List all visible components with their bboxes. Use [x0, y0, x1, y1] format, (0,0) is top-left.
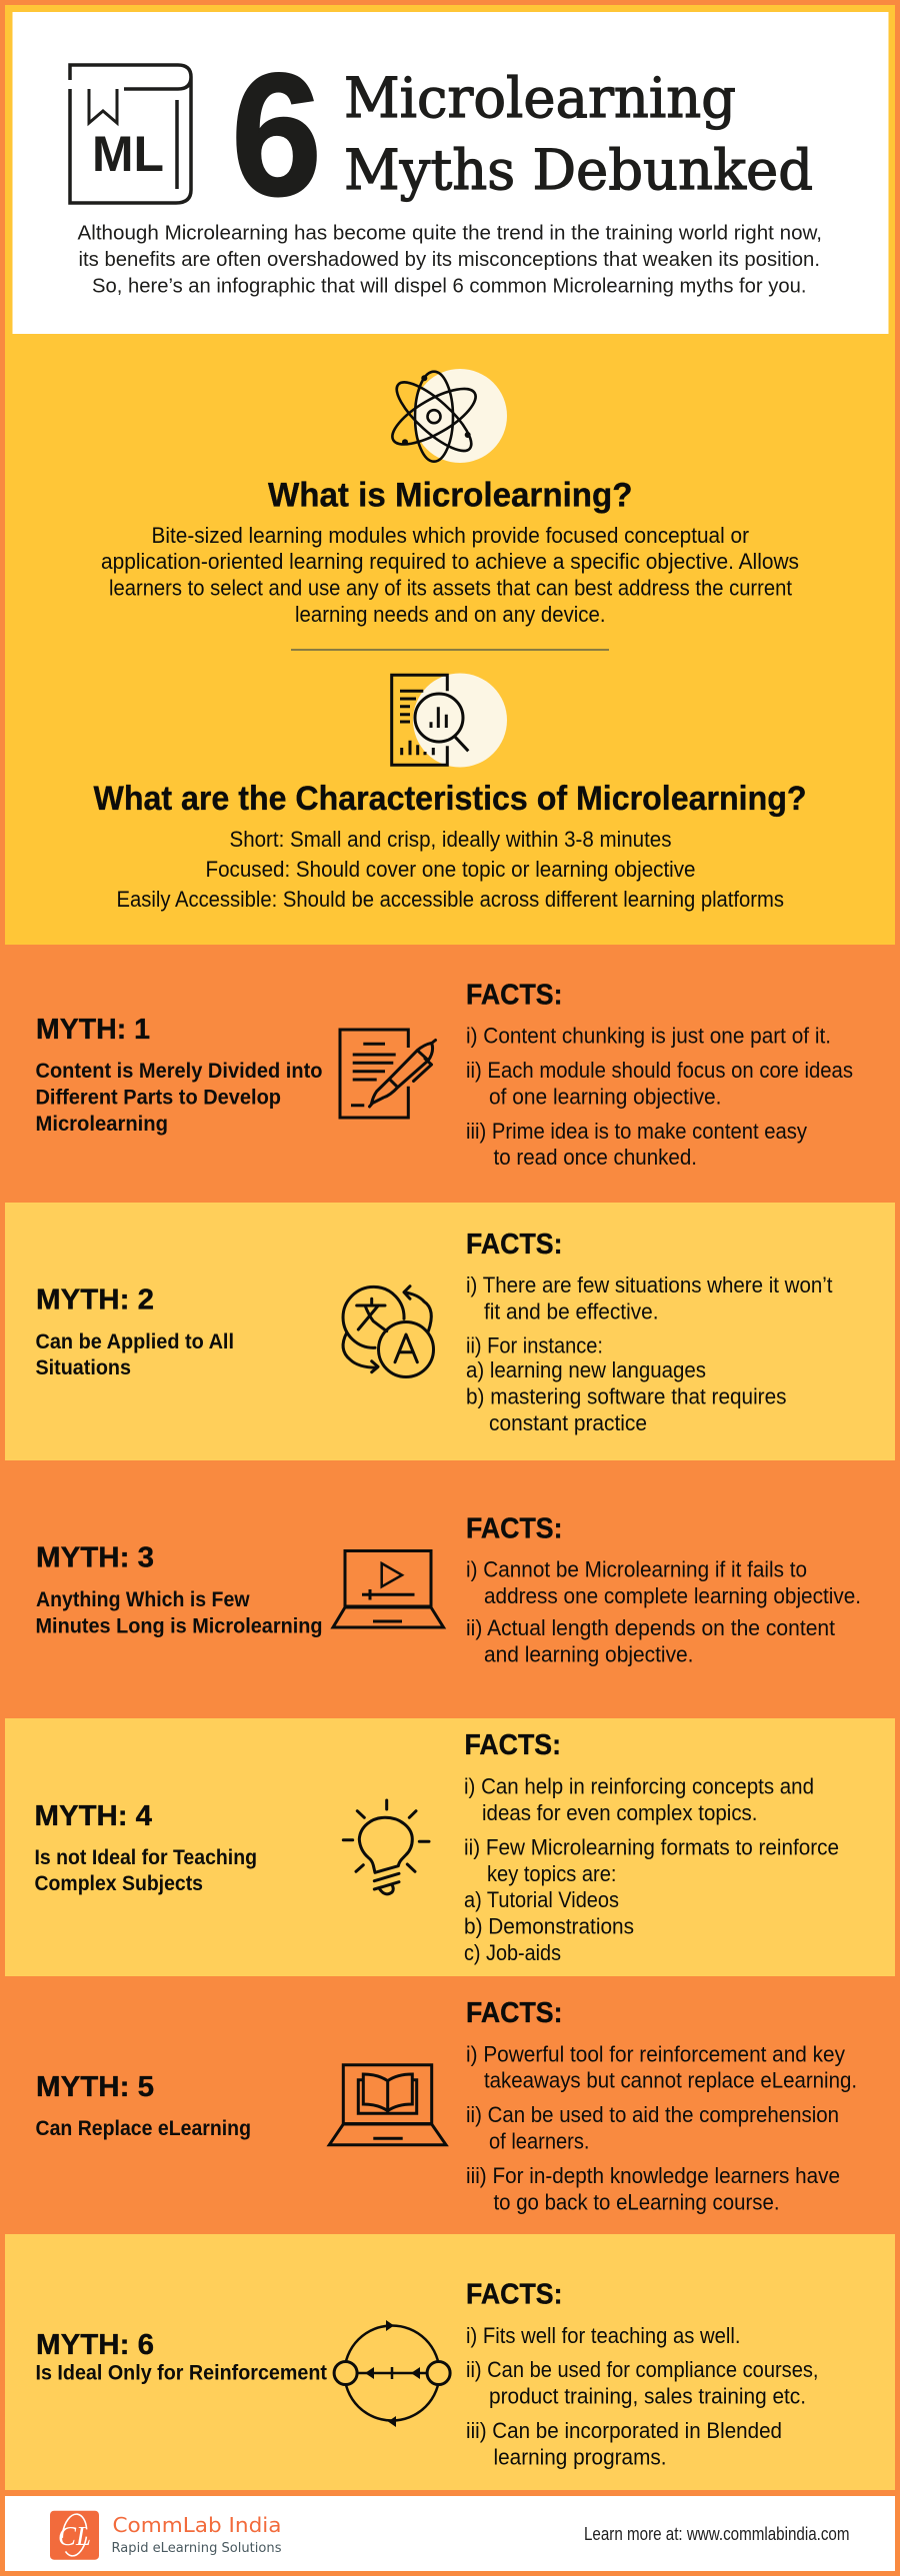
- text block: definition: [101, 523, 799, 627]
- title: 6: [231, 38, 322, 233]
- text block: characteristics list: Short: Small and crisp, ideally within 3-8 minutes: [230, 827, 672, 852]
- facts list: c) Job-aids: [464, 1940, 561, 1965]
- text block: introduction: So, here’s an infographic that will dispel 6 common Microlearning myths for you.: [92, 274, 806, 298]
- facts list: iii) For in-depth knowledge learners have: [466, 2163, 840, 2188]
- icon: laptop with book: [329, 2065, 446, 2145]
- myth 3 statement: [36, 1588, 322, 1637]
- text: learn more link: Learn more at: www.commlabindia.com: [584, 2524, 850, 2544]
- facts list: i) Cannot be Microlearning if it fails to: [466, 1557, 807, 1581]
- facts list: ideas for even complex topics.: [482, 1800, 758, 1825]
- title: [231, 38, 813, 233]
- text block: definition: learners to select and use any of its assets that can best address the current: [109, 576, 792, 600]
- facts list: [464, 1773, 839, 1965]
- heading: characteristics: What are the Characteristics of Microlearning?: [94, 780, 806, 818]
- panel: header and microlearning definition: [5, 5, 895, 945]
- myth 6 heading: MYTH: 6: [36, 2329, 154, 2361]
- facts list: [466, 1273, 832, 1435]
- facts list: of one learning objective.: [489, 1084, 722, 1110]
- myth 1 statement: [36, 1060, 322, 1136]
- text block: introduction: Although Microlearning has become quite the trend in the training world right now,: [78, 222, 822, 244]
- icon: ML book: ML: [92, 126, 164, 182]
- facts list: ii) Can be used to aid the comprehension: [466, 2102, 839, 2127]
- facts list: i) Powerful tool for reinforcement and key: [466, 2041, 845, 2067]
- facts list: ii) Can be used for compliance courses,: [466, 2357, 818, 2382]
- myth 2 statement: Situations: [36, 1356, 131, 1379]
- facts heading: FACTS:: [466, 980, 562, 1012]
- myth 2 heading: MYTH: 2: [36, 1284, 154, 1315]
- facts heading: FACTS:: [466, 1513, 562, 1545]
- facts heading: FACTS:: [466, 1229, 562, 1261]
- facts list: a) Tutorial Videos: [464, 1887, 619, 1912]
- myth 5 heading: MYTH: 5: [36, 2071, 154, 2103]
- myth 3 statement: Anything Which is Few: [36, 1588, 250, 1611]
- text block: characteristics list: Focused: Should cover one topic or learning objective: [206, 857, 696, 882]
- myth 4 statement: Is not Ideal for Teaching: [34, 1846, 257, 1869]
- facts list: takeaways but cannot replace eLearning.: [484, 2067, 857, 2093]
- myth 3 heading: MYTH: 3: [36, 1541, 154, 1573]
- icon: atom: [385, 369, 507, 463]
- facts list: to read once chunked.: [494, 1145, 697, 1170]
- facts list: key topics are:: [487, 1861, 616, 1886]
- icon: document and pen: [340, 1030, 436, 1118]
- facts list: a) learning new languages: [466, 1357, 706, 1382]
- facts list: to go back to eLearning course.: [494, 2189, 780, 2215]
- icon: ML book: [70, 65, 191, 203]
- facts list: product training, sales training etc.: [489, 2383, 806, 2409]
- icon: translation: [343, 1287, 434, 1377]
- myth 1 statement: Microlearning: [36, 1113, 168, 1136]
- myth 1 statement: Different Parts to Develop: [36, 1086, 281, 1110]
- facts list: [466, 1557, 861, 1667]
- facts list: ii) For instance:: [466, 1333, 603, 1357]
- text block: definition: Bite-sized learning modules which provide focused conceptual or: [152, 523, 749, 548]
- myth 1 statement: Content is Merely Divided into: [36, 1060, 322, 1083]
- facts list: address one complete learning objective.: [484, 1583, 861, 1608]
- myth 3 statement: Minutes Long is Microlearning: [36, 1615, 322, 1637]
- facts list: i) There are few situations where it won’t: [466, 1273, 832, 1297]
- text block: introduction: its benefits are often overshadowed by its misconceptions that weaken its position.: [78, 248, 820, 271]
- facts list: b) Demonstrations: [464, 1913, 634, 1939]
- panel: myth 4: [5, 1718, 895, 1976]
- icon: light bulb: [343, 1800, 429, 1894]
- logo: CommLab India: CommLab India: [112, 2513, 282, 2537]
- title: Microlearning: [344, 66, 736, 130]
- icon: cycle diagram: [334, 2320, 450, 2427]
- facts heading: FACTS:: [464, 1729, 561, 1761]
- facts list: iii) Prime idea is to make content easy: [466, 1119, 807, 1144]
- myth 4 heading: MYTH: 4: [34, 1800, 152, 1832]
- myth 4 statement: [34, 1846, 257, 1895]
- myth 6 statement: Is Ideal Only for Reinforcement: [36, 2361, 327, 2385]
- text block: characteristics list: [116, 827, 784, 912]
- facts list: iii) Can be incorporated in Blended: [466, 2418, 782, 2443]
- facts list: ii) Few Microlearning formats to reinforce: [464, 1835, 839, 1859]
- facts list: i) Fits well for teaching as well.: [466, 2323, 740, 2348]
- heading: what is microlearning: What is Microlearning?: [268, 476, 632, 514]
- facts list: i) Content chunking is just one part of it.: [466, 1024, 831, 1048]
- icon: laptop with video: [333, 1551, 444, 1627]
- facts list: and learning objective.: [484, 1641, 694, 1667]
- text block: definition: application-oriented learning required to achieve a specific objective. Allows: [101, 549, 799, 574]
- text block: definition: learning needs and on any device.: [295, 602, 606, 627]
- panel: myth 3: [0, 1460, 900, 1718]
- panel: footer: [5, 2496, 895, 2571]
- icon: report with magnifier: [392, 674, 507, 768]
- myth 4 statement: Complex Subjects: [34, 1872, 203, 1895]
- myth 2 statement: [36, 1330, 234, 1379]
- facts heading: FACTS:: [466, 2279, 562, 2311]
- logo: CommLab India: Rapid eLearning Solutions: [112, 2541, 282, 2556]
- logo: CommLab India: [50, 2511, 282, 2560]
- panel: myth 5: [0, 1976, 900, 2234]
- facts list: i) Can help in reinforcing concepts and: [464, 1773, 814, 1799]
- facts list: learning programs.: [494, 2445, 666, 2469]
- logo: CommLab India: CL: [58, 2521, 91, 2551]
- facts list: ii) Each module should focus on core ideas: [466, 1058, 853, 1083]
- facts heading: FACTS:: [466, 1997, 562, 2029]
- panel: myth 1: [0, 945, 900, 1203]
- panel: myth 2: [5, 1203, 895, 1460]
- myth 5 statement: Can Replace eLearning: [36, 2117, 251, 2140]
- facts list: ii) Actual length depends on the content: [466, 1615, 835, 1640]
- myth 1 heading: MYTH: 1: [36, 1014, 150, 1046]
- facts list: [466, 2323, 818, 2469]
- myth 2 statement: Can be Applied to All: [36, 1330, 234, 1353]
- title: Myths Debunked: [344, 138, 813, 202]
- facts list: [466, 2041, 857, 2215]
- text block: introduction: [78, 222, 822, 298]
- panel: myth 6: [5, 2234, 895, 2490]
- facts list: [466, 1024, 853, 1170]
- text block: characteristics list: Easily Accessible: Should be accessible across different learning platforms: [116, 887, 784, 912]
- facts list: of learners.: [489, 2129, 590, 2153]
- facts list: b) mastering software that requires: [466, 1383, 786, 1409]
- facts list: constant practice: [489, 1410, 647, 1435]
- facts list: fit and be effective.: [484, 1299, 658, 1323]
